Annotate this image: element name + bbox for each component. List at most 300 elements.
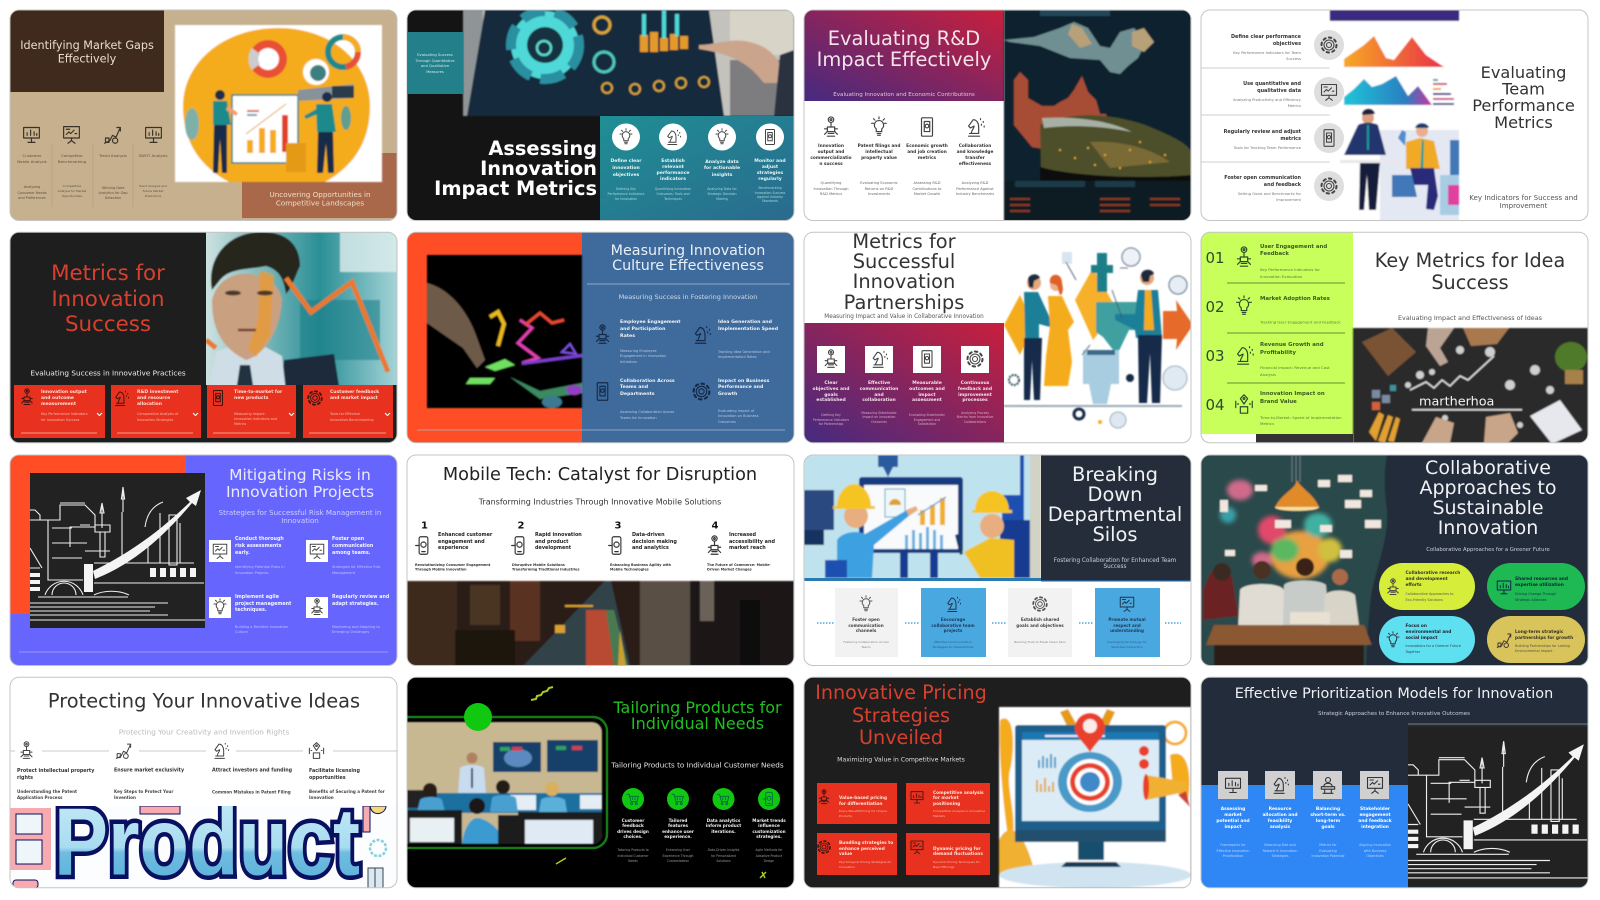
column: Continuous feedback: Metrics from Innovative	[957, 415, 993, 419]
photo: finger touching neon shapes	[427, 255, 582, 408]
step: Establish shared goals: goals and objectives	[1016, 622, 1064, 628]
step: Establish shared goals: Building Trust to Break Down Silos	[1014, 640, 1066, 644]
row: Foster open communication and feedback	[1224, 171, 1344, 202]
column: SWOT Analysis: Trend Analysis and	[138, 184, 167, 188]
box: Innovation output	[14, 385, 105, 438]
column 1: experience	[438, 545, 469, 551]
item: Conduct thorough	[209, 536, 285, 575]
column: Assessing market potential: Assessing	[1221, 806, 1245, 812]
step: Encourage collaborative: Effective Communication	[934, 640, 972, 644]
column: Define clear: for Innovation	[615, 197, 637, 201]
column: Effective communication: Outcomes	[871, 420, 887, 424]
column: Innovation output: commercializatio	[810, 154, 852, 160]
column 4: market reach	[729, 545, 766, 551]
column: Competitor Benchmarking: Competitor	[61, 152, 83, 158]
row: Define clear performance objectives: Define clear performance	[1231, 34, 1302, 40]
column 3	[609, 520, 677, 572]
item: Employee Engagement	[596, 318, 681, 364]
column: Clear objectives: Performance Indicators	[813, 418, 849, 422]
image: line art factory with rising arrow	[30, 473, 205, 628]
column: Resource allocation: feasibility	[1268, 818, 1292, 824]
column: Data analytics: for Personalized	[711, 854, 736, 858]
column: Customer Needs Analysis: Customer	[23, 152, 42, 158]
column: Customer feedback: Needs	[628, 859, 638, 863]
column: Facilitate licensing: Benefits of Securing a Patent for	[309, 788, 385, 794]
box: Value-based pricing: for differentiation	[839, 800, 882, 806]
box: Bundling strategies: Innovation	[839, 865, 855, 869]
subtitle: Maximizing Value in Competitive Markets	[837, 756, 965, 764]
row: Regularly review and adjust metrics: metrics	[1280, 136, 1301, 142]
callout box: Measures	[426, 70, 444, 74]
box: R&D investment: Innovation Strategies	[137, 418, 174, 422]
title: Collaborative	[1425, 457, 1551, 479]
column 3: decision making	[632, 539, 677, 545]
column: Clear objectives: goals	[824, 392, 838, 398]
subtitle: Uncovering Opportunities in	[269, 190, 371, 198]
column: Clear objectives: for Partnerships	[819, 422, 844, 426]
title: Individual Needs	[631, 714, 764, 732]
box: Dynamic pricing	[906, 833, 990, 875]
column: Collaboration	[956, 119, 994, 196]
box: Value-based pricing: Value-based pricing	[839, 794, 887, 800]
item: Impact on Business: Performance and	[718, 384, 763, 390]
item: Foster open: communication	[332, 542, 374, 548]
column: Define clear: objectives	[613, 172, 639, 178]
box: Dynamic pricing: demand fluctuations	[933, 850, 983, 856]
column: Define clear: Defining Key	[616, 187, 636, 191]
column 1: engagement and	[438, 539, 485, 545]
title panel: Success	[1104, 564, 1126, 570]
column 4	[707, 520, 775, 572]
column: Innovation output: Innovation Through	[813, 187, 849, 191]
photo: chalkboard strategy table	[1353, 328, 1588, 444]
column: Resource allocation: analysis	[1270, 824, 1290, 830]
column: Continuous feedback: Continuous	[961, 380, 990, 386]
pill: Collaborative research: Collaborative Approaches to	[1406, 592, 1454, 596]
column: Assessing market potential: market	[1224, 812, 1242, 818]
column 3: Enhancing Business Agility with	[610, 563, 672, 567]
column 3: Data-driven	[632, 532, 665, 538]
column 4: Driven Market Changes	[707, 568, 752, 572]
title: Unveiled	[859, 726, 943, 748]
column: Monitor and adjust	[754, 124, 786, 203]
callout box: and Qualitative	[421, 64, 450, 68]
item: Employee Engagement: Engagement in Innovation	[620, 354, 666, 358]
column: Establish relevant	[655, 124, 691, 201]
column: Analyze data: insights	[712, 172, 733, 178]
box: Time-to-market: Innovation Indicators and	[234, 417, 277, 421]
column: Patent filings	[858, 117, 900, 196]
title: Approaches to	[1420, 477, 1556, 499]
column: Monitor and adjust: Standards	[762, 199, 778, 203]
column: Analyze data: for actionable	[704, 164, 740, 170]
item: Employee Engagement: Measuring Employee	[620, 349, 657, 353]
column: Data analytics: Data analytics	[707, 818, 741, 822]
step: Promote mutual respect: respect and	[1113, 622, 1141, 628]
column: Monitor and adjust: Monitor and	[754, 158, 786, 164]
item: Idea Generation: Implementation Speed	[718, 326, 778, 332]
item: Impact on Business: Innovation on Business	[718, 414, 759, 418]
column 4: 4	[712, 520, 719, 532]
column: Assessing market potential: potential and	[1216, 818, 1250, 824]
row 04: Brand Value	[1260, 399, 1297, 405]
row: Use quantitative and qualitative data: qualitative data	[1257, 88, 1301, 94]
column 3: Mobile Technologies	[610, 568, 649, 572]
box: R&D investment: R&D investment	[137, 388, 179, 394]
item: Collaboration Across	[597, 378, 675, 420]
pill: Collaborative research: efforts	[1406, 582, 1422, 588]
column: Patent filings: Evaluating Economic	[860, 181, 898, 185]
column: Innovation output: Innovation	[818, 142, 844, 148]
column: Facilitate licensing: opportunities	[309, 774, 346, 780]
item: Idea Generation: Idea Generation and	[718, 318, 772, 324]
title: Evaluating	[1481, 62, 1566, 82]
column: Patent filings: intellectual	[865, 148, 893, 154]
column: Stakeholder engagement: with Business	[1364, 849, 1387, 853]
column: Assessing market potential: Prioritization	[1223, 854, 1243, 858]
header panel: Evaluating R&D	[828, 26, 980, 50]
illustration: monitor with target and location pin	[999, 707, 1191, 888]
photo frame with control room	[390, 703, 607, 848]
card: Collaborative Approaches to Sustainable Innovation	[1201, 455, 1588, 666]
column: Stakeholder engagement: engagement	[1359, 812, 1391, 818]
column: Customer Needs Analysis: and Preferences	[18, 196, 46, 200]
subtitle: Transforming Industries Through Innovative Mobile Solutions	[478, 498, 721, 506]
column: Measurable outcomes: Evaluating Stakeholder	[909, 413, 946, 417]
item: Implement agile: Building a Resilient Innovation	[235, 625, 288, 629]
title: Mitigating Risks in	[229, 466, 371, 484]
box: Competitive analysis: for market	[933, 794, 959, 800]
column: Balancing short-term: short-term vs.	[1310, 812, 1346, 818]
column: Measurable outcomes: outcomes and	[909, 386, 945, 392]
item: Employee Engagement: Employee Engagement	[620, 318, 681, 324]
row 01	[1206, 244, 1327, 278]
column: Protect intellectual property: Protect intellectual property	[17, 768, 95, 774]
column: Measurable outcomes: Engagement and	[914, 418, 940, 422]
item: Regularly review	[306, 594, 390, 634]
column: Analyze data	[704, 124, 740, 201]
box: Time-to-market: Measuring Impact:	[234, 412, 266, 416]
card: Innovative Pricing Strategies Unveiled	[804, 677, 1191, 888]
column: Monitor and adjust: regularly	[758, 176, 782, 182]
column: Measurable outcomes: assessment	[912, 396, 943, 402]
item: Idea Generation: Tracking Idea Generation and	[717, 350, 770, 354]
callout box: Through Quantitative	[414, 59, 455, 63]
column: Customer feedback: choices.	[623, 834, 643, 838]
column: Economic growth	[906, 118, 948, 196]
header panel: Evaluating Innovation and Economic Contributions	[833, 92, 975, 98]
column: Define clear	[608, 124, 645, 201]
column 2: Transforming Traditional Industries	[512, 568, 579, 572]
row: Regularly review and adjust metrics: Regularly review and adjust	[1224, 129, 1302, 135]
card: Assessing Innovation Impact Metrics	[407, 10, 794, 221]
title: Mobile Tech: Catalyst for Disruption	[443, 465, 757, 485]
column: Competitor Benchmarking: Competitive	[63, 184, 81, 188]
row 04	[1206, 391, 1342, 426]
column: Assessing market potential	[1216, 771, 1250, 858]
box: Innovation output: Innovation output	[41, 388, 88, 394]
card: Evaluating R&D Impact Effectively	[804, 10, 1191, 221]
box: Value-based pricing: Products	[839, 814, 852, 818]
column: Measurable outcomes: Satisfaction	[918, 422, 936, 426]
column: Patent filings: Patent filings and	[858, 142, 900, 148]
column: Stakeholder engagement: and feedback	[1358, 818, 1392, 824]
column: Continuous feedback: feedback and	[958, 386, 992, 392]
item: Employee Engagement: and Participation	[620, 326, 665, 332]
column: Tailored features: Tailored	[669, 818, 687, 822]
column: Data analytics: iterations.	[711, 828, 736, 834]
image: line art factory with rising arrow	[1408, 727, 1588, 886]
row 01: 01	[1206, 249, 1225, 267]
column: Protect intellectual property: Understanding the Patent	[17, 788, 77, 794]
column: Patent filings: Investments	[868, 192, 890, 196]
item: Foster open: among teams.	[332, 550, 371, 556]
column: Collaboration: and knowledge	[957, 148, 993, 154]
title: Performance	[1472, 96, 1575, 114]
column: Effective communication: communication	[860, 386, 898, 392]
panel: numbered metrics	[1201, 232, 1353, 443]
column: Monitor and adjust: Benchmarking	[758, 186, 782, 190]
row: Regularly review and adjust metrics	[1224, 123, 1344, 153]
card: Metrics for Innovation Success	[10, 226, 400, 443]
column 2: Rapid innovation	[535, 532, 582, 538]
column: Stakeholder engagement: Objectives	[1366, 854, 1384, 858]
column 1: 1	[421, 520, 428, 532]
box: Competitive analysis	[906, 783, 990, 824]
column: Effective communication	[860, 346, 898, 424]
column: Clear objectives: Defining Key	[821, 413, 841, 417]
column: SWOT Analysis: Future Market	[143, 189, 164, 193]
card: Identifying Market Gaps Effectively	[10, 10, 397, 221]
pill: Focus on environmental: social impact	[1406, 634, 1437, 640]
step: Foster open communication: Foster open	[852, 616, 880, 622]
column: SWOT Analysis: Predictions	[145, 194, 162, 198]
row 04: Metrics	[1260, 420, 1274, 426]
column: Balancing short-term: long-term	[1316, 818, 1341, 824]
row 04: Time-to-Market: Speed of Implementation	[1259, 414, 1342, 420]
column: Balancing short-term: Evaluating	[1319, 849, 1337, 853]
row: Foster open communication and feedback: and feedback	[1264, 182, 1302, 188]
row 02	[1206, 296, 1341, 324]
box: Innovation output: measurement	[41, 400, 77, 406]
column: Customer Needs Analysis: Analyzing	[24, 185, 40, 189]
column: Assessing market potential: Frameworks for	[1220, 843, 1246, 847]
title panel: Departmental	[1048, 502, 1182, 526]
item: Collaboration Across: Collaboration Across	[620, 378, 675, 384]
box: Dynamic pricing: Dynamic Pricing Techniques for	[933, 860, 981, 864]
column: Establish relevant: Establish	[661, 158, 685, 164]
header panel	[804, 10, 1004, 101]
item: Implement agile: Culture	[235, 630, 248, 634]
column: Monitor and adjust: strategies	[757, 170, 783, 176]
column: Balancing short-term: goals	[1321, 824, 1335, 830]
title: Partnerships	[844, 290, 964, 314]
row 01: Innovation Evaluation	[1260, 274, 1303, 278]
column: Measurable outcomes: impact	[918, 392, 937, 398]
box: Bundling strategies	[817, 833, 897, 875]
item: Regularly review: Monitoring and Adapting to	[332, 625, 380, 629]
column: Customer Needs Analysis: Consumer Needs	[18, 191, 47, 195]
row: Define clear performance objectives: objectives	[1273, 41, 1301, 47]
pill: Shared resources: expertise utilization	[1515, 582, 1564, 588]
card: Protecting Your Innovative Ideas	[10, 677, 397, 896]
column 2: Disruptive Mobile Solutions	[512, 563, 565, 567]
subtitle: Strategies for Successful Risk Management in	[219, 508, 381, 516]
step: Promote mutual respect: Seamless Interaction	[1111, 645, 1143, 649]
subtitle: Improvement	[1500, 200, 1548, 210]
step: Establish shared goals	[1008, 588, 1072, 657]
box: Bundling strategies: value	[839, 850, 852, 856]
title: Innovation	[1438, 517, 1538, 539]
column: Competitor Benchmarking	[58, 127, 87, 198]
item: Foster open: Management	[332, 571, 356, 575]
item: Collaboration Across: Assessing Collaboration Across	[620, 410, 674, 414]
pill: Collaborative research: and development	[1406, 576, 1448, 582]
box: Bundling strategies: enhance perceived	[839, 846, 885, 852]
pill: Focus on environmental: Innovations for a Greener Future	[1406, 644, 1461, 648]
item: Conduct thorough: Identifying Potential Risks in	[235, 565, 285, 569]
column: Effective communication: collaboration	[862, 396, 896, 402]
title: Key Metrics for Idea	[1375, 248, 1565, 272]
item: Employee Engagement: Initiatives	[620, 360, 637, 364]
column: Collaboration: Analyzing R&D	[962, 181, 989, 185]
item: Impact on Business: Evaluating Impact of	[718, 409, 755, 413]
column: Attract investors: Common Mistakes in Patent Filing	[212, 790, 291, 794]
pill: Collaborative research: Eco-Friendly Solutions	[1406, 598, 1443, 602]
column: Economic growth: metrics	[918, 154, 937, 160]
title: Success	[1431, 270, 1509, 294]
column: Protect intellectual property: Application Process	[17, 794, 63, 800]
item: Foster open: Foster open	[332, 536, 365, 542]
column: Economic growth: Market Growth	[914, 192, 940, 196]
column: Balancing short-term: Innovation Potential	[1312, 854, 1345, 858]
row: Foster open communication and feedback: Improvement	[1276, 198, 1302, 202]
item: Collaboration Across: Teams and	[620, 384, 648, 390]
box: R&D investment: and resource	[137, 394, 170, 400]
column: Collaboration: Industry Benchmarks	[956, 192, 994, 196]
row 01: User Engagement and	[1260, 244, 1327, 250]
box: Bundling strategies: Psychological Pricing Strategies for	[839, 860, 892, 864]
column: Assessing market potential: Effective Innovation	[1217, 849, 1249, 853]
column: Economic growth: Contributions to	[913, 187, 941, 191]
row 02: Tracking User Engagement and Feedback	[1259, 320, 1341, 324]
title panel	[1041, 455, 1191, 582]
pill: Focus on environmental: Focus on	[1406, 622, 1427, 628]
card: Mobile Tech: Catalyst for Disruption	[407, 455, 794, 666]
column: Establish relevant: Techniques	[663, 197, 682, 201]
item: Employee Engagement: Rates	[620, 332, 635, 338]
column 1: Enhanced customer	[438, 532, 493, 538]
row: Use quantitative and qualitative data: Analyzing Productivity and Efficiency	[1233, 98, 1302, 102]
column: Establish relevant: indicators	[660, 176, 686, 182]
title: Metrics	[1494, 112, 1553, 132]
row 03: Profitability	[1260, 350, 1297, 356]
title: Assessing	[488, 136, 597, 160]
image: big Product wordmark: Product	[54, 788, 360, 896]
column: Stakeholder engagement	[1358, 771, 1392, 858]
column: Market trends: influence	[758, 822, 780, 828]
item: Conduct thorough: early.	[235, 550, 250, 556]
column: Define clear: innovation	[612, 164, 640, 170]
card: Measuring Innovation Culture Effectiveness	[407, 232, 794, 443]
card: Evaluating Team Performance Metrics	[1201, 10, 1588, 221]
pill: Long-term partnerships: Building Partnerships for Lasting	[1515, 644, 1570, 648]
column: Resource allocation: Balancing Risk and	[1264, 843, 1296, 847]
subtitle: Innovation	[281, 516, 319, 524]
column: Protect intellectual property	[17, 742, 95, 800]
item: Foster open: Strategies for Effective Risk	[332, 565, 382, 569]
row 03: Analysis	[1260, 372, 1276, 376]
column: Effective communication: Impact on Innovation	[863, 415, 895, 419]
title panel: Silos	[1092, 522, 1138, 546]
column: Collaboration: transfer	[965, 154, 986, 160]
step: Foster open communication: channels	[856, 628, 877, 632]
step: Foster open communication: Fostering Collaboration Across	[843, 640, 889, 644]
column: Define clear: Define clear	[610, 158, 642, 164]
title: Protecting Your Innovative Ideas	[48, 690, 360, 712]
column: Measurable outcomes	[909, 346, 946, 426]
pill: Collaborative research	[1379, 563, 1475, 610]
title: Effective Prioritization Models for Innovation	[1235, 686, 1553, 702]
title: Metrics for	[852, 230, 956, 252]
row: Regularly review and adjust metrics: Tools for Tracking Team Performance	[1233, 146, 1302, 150]
column: SWOT Analysis	[138, 128, 168, 198]
item: Implement agile: project management	[235, 600, 292, 606]
column: Monitor and adjust: Against Industry	[757, 195, 783, 199]
box: Competitive analysis: Competitive analysis	[933, 790, 984, 796]
box: Innovation output: and outcome	[41, 394, 74, 400]
column 2: development	[535, 545, 572, 551]
item: Implement agile: techniques.	[235, 606, 267, 612]
panel: four objectives	[600, 116, 794, 221]
card: Tailoring Products for Individual Needs	[390, 677, 794, 888]
step: Promote mutual respect: Promote mutual	[1108, 616, 1146, 622]
item: Conduct thorough: Innovation Projects	[235, 571, 269, 575]
title: Impact Metrics	[434, 176, 597, 200]
box: Time-to-market	[207, 385, 296, 438]
column: Tailored features: enhance user	[662, 828, 695, 834]
column: Continuous feedback: Collaborations	[964, 420, 987, 424]
column: Collaboration: Collaboration	[959, 142, 991, 148]
subtitle: Strategic Approaches to Enhance Innovative Outcomes	[1318, 711, 1470, 717]
column: Stakeholder engagement: Aligning Innovation	[1359, 843, 1391, 847]
item: Conduct thorough: risk assessments	[235, 542, 282, 548]
step: Promote mutual respect	[1095, 588, 1160, 657]
card: Breaking Down Departmental Silos	[804, 455, 1191, 666]
column: Data analytics: inform product	[706, 822, 741, 828]
item: Impact on Business: Growth	[718, 390, 737, 396]
column: Stakeholder engagement: integration	[1361, 824, 1389, 830]
pill: Shared resources: Strategic Alliances	[1515, 598, 1547, 602]
step: Promote mutual respect: understanding	[1110, 628, 1144, 632]
item: Collaboration Across: Departments	[620, 390, 655, 396]
column: Tailored features: Experience Through	[662, 854, 694, 858]
box: Innovation output: for Innovation Success	[41, 418, 80, 422]
box: Competitive analysis: Markets	[933, 814, 945, 818]
column 2: and product	[535, 539, 569, 545]
column: Trend Analysis	[98, 128, 128, 200]
column: Analyze data: Making	[716, 197, 728, 201]
column: Ensure market exclusivity: Invention	[114, 794, 136, 800]
card: Mitigating Risks in Innovation Projects	[10, 455, 397, 666]
column: Innovation output: output and	[818, 148, 844, 154]
column: Innovation output: R&D Metrics	[820, 192, 842, 196]
column: Competitor Benchmarking: Opportunities	[62, 194, 83, 198]
title panel: Fostering Collaboration for Enhanced Team	[1054, 558, 1177, 564]
column: Attract investors	[212, 743, 293, 794]
column: Balancing short-term: Balancing	[1316, 806, 1340, 812]
photo: dim cafe with glowing pyramid chart	[407, 581, 794, 666]
